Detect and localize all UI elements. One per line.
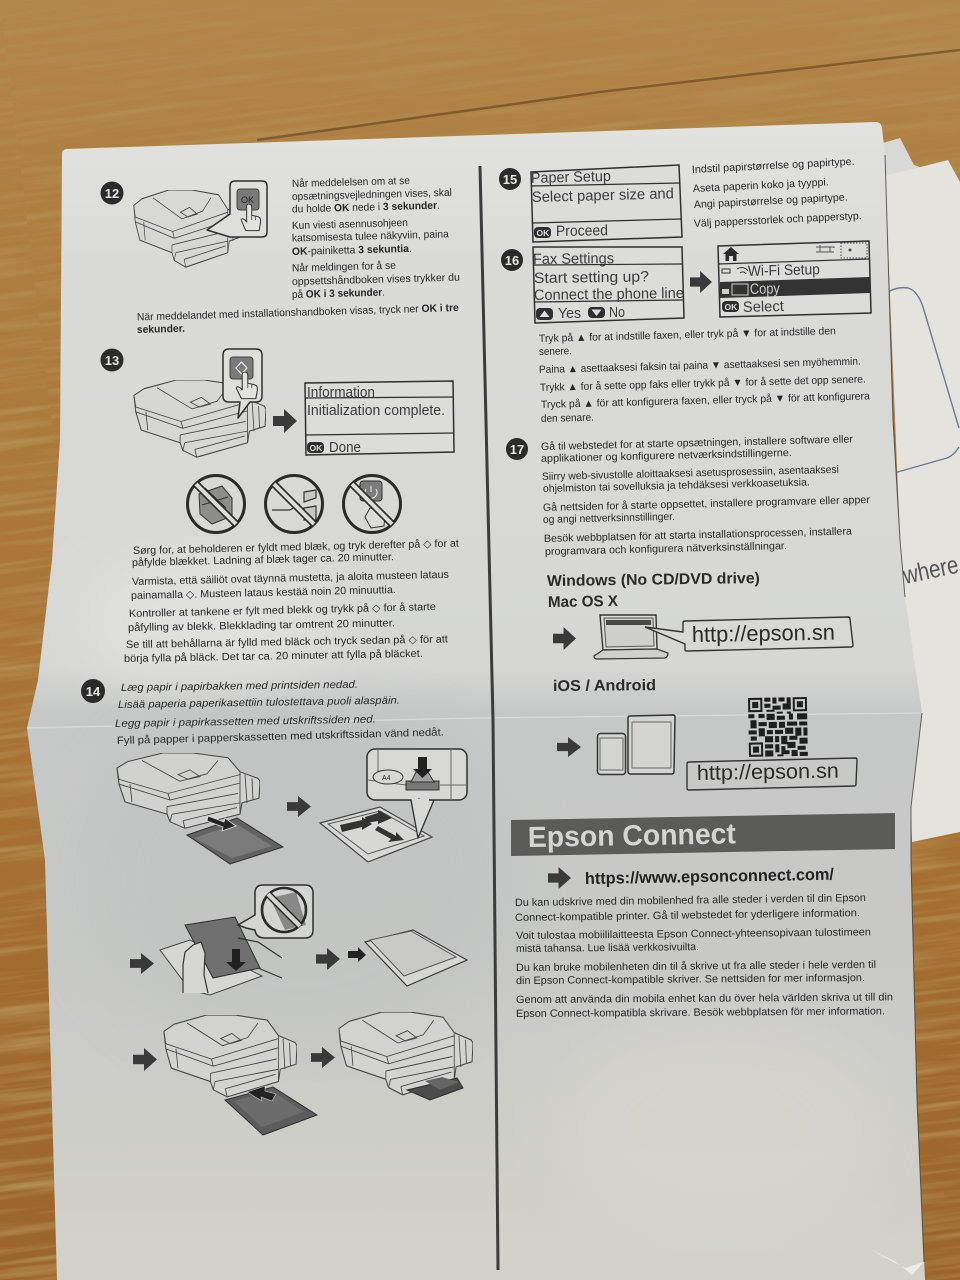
badge 17 (506, 438, 528, 460)
heading: Windows / Mac (547, 570, 760, 611)
icon: laptop (594, 615, 668, 659)
Epson Connect section (511, 813, 895, 1020)
URL: https://www.epsonconnect.com/ (585, 866, 834, 888)
heading: Windows / Mac: Windows (No CD/DVD drive) (547, 570, 760, 590)
step 14 instructions: Fyll på papper i papperskassetten med utskriftssidan vänd nedåt. (117, 726, 444, 747)
step 12 instructions: OK-painiketta 3 sekuntia. (292, 243, 412, 258)
step 15 instructions: Välj pappersstorlek och papperstyp. (694, 210, 862, 230)
arrow: mobile (557, 737, 581, 757)
Epson Connect description (515, 892, 893, 1020)
callout: OK button: OK (241, 195, 254, 205)
QR code (748, 697, 808, 757)
step 16 (501, 241, 871, 425)
step 12 instructions: När meddelandet med installationshandboken visas, tryck ner OK i tre (137, 302, 459, 323)
Epson Connect description: Du kan bruke mobilenheten din til å skrive ut fra alle steder i hele verden til (516, 959, 876, 974)
step 15 instructions: Angi papirstørrelse og papirtype. (694, 191, 848, 211)
printer with output tray extended (339, 1012, 473, 1100)
Epson Connect description: Genom att använda din mobila enhet kan du över hela världen skriva ut till din (516, 991, 893, 1006)
step 12 instructions: på OK i 3 sekunder. (292, 287, 385, 301)
step 17 instructions: Gå til webstedet for at starte opsætningen, installere software eller (541, 433, 853, 453)
step 16 instructions: senere. (539, 345, 572, 358)
LCD screen: paper setup (531, 165, 682, 242)
step 12 (100, 175, 460, 336)
center column divider (480, 166, 498, 1270)
step 14 instructions: Lisää paperia paperikasettiin tulostettava puoli alaspäin. (118, 695, 400, 711)
callout: http://epson.sn (645, 617, 853, 651)
LCD screen: home menu (718, 241, 871, 317)
LCD screen: fax settings: Fax Settings (533, 250, 614, 268)
printer illustration 12 (134, 190, 243, 267)
LCD screen: home menu: Wi-Fi Setup (748, 261, 820, 280)
LCD screen: paper setup: Select paper size and (532, 185, 674, 206)
printer with tray removed (117, 753, 283, 864)
badge 13: 13 (105, 353, 119, 368)
step 15 instructions: Aseta paperin koko ja tyyppi. (693, 176, 829, 195)
step 12 instructions: opsætningsvejledningen vises, skal (292, 187, 452, 203)
LCD screen: paper setup: Paper Setup (531, 168, 611, 187)
step 12 instructions: Kun viesti asennusohjeen (292, 217, 408, 232)
badge 15: 15 (503, 172, 517, 187)
LCD screen: initialization complete: OK (310, 443, 323, 453)
LCD screen: paper setup: OK (536, 228, 550, 238)
LCD screen: initialization complete: Information (307, 384, 375, 401)
LCD screen: initialization complete (305, 381, 454, 456)
step 12 instructions: sekunder. (137, 323, 185, 336)
step 16 instructions: den senare. (541, 412, 594, 425)
step 13 instructions: Kontroller at tankene er fylt med blekk og trykk på ◇ for å starte (129, 601, 436, 620)
step 16 instructions: Trykk ▲ for å sette opp faks eller trykk på ▼ for å sette det opp senere. (540, 373, 866, 394)
LCD screen: home menu: Copy (750, 280, 781, 298)
step 13 instructions: Se till att behållarna är fylld med bläck och tryck sedan på ◇ för att (126, 633, 448, 651)
icon: do not press power (344, 476, 400, 532)
LCD screen: fax settings: Yes (558, 305, 581, 322)
step 12 instructions: katsomisesta tulee näkyviin, paina (292, 228, 449, 244)
arrow 14a (287, 796, 311, 817)
step 13 instructions: painamalla ◇. Musteen lataus kestää noin 20 minuuttia. (131, 584, 396, 602)
arrow 14d (133, 1048, 157, 1071)
step 17 instructions: Gå nettsiden for å starte oppsettet, installere programvare eller apper (543, 494, 870, 514)
heading: Windows / Mac: Mac OS X (548, 593, 619, 611)
step 12 instructions (137, 175, 460, 336)
arrow 16 (690, 271, 712, 293)
banner: Epson Connect (528, 818, 736, 854)
Epson Connect description: mistä tahansa. Lue lisää verkkosivuilta. (516, 941, 699, 955)
icon: do not open printer (188, 476, 244, 532)
back paper sheets: . (892, 427, 895, 439)
step 12 instructions: oppsettshåndboken vises trykker du (292, 272, 460, 288)
badge 15 (499, 168, 521, 190)
icon: phone and tablet (598, 715, 675, 774)
badge 12: 12 (105, 186, 119, 201)
callout: paper orientation warning (238, 885, 313, 938)
Epson Connect description: Connect-kompatible printer. Gå til webstedet for yderligere information. (515, 907, 860, 924)
tray loaded with paper (348, 930, 467, 986)
callout: http://epson.sn: http://epson.sn (692, 620, 835, 647)
step 17 instructions: Besök webbplatsen för att starta installationsprocessen, installera (544, 525, 852, 545)
step 13 instructions: Varmista, että säiliöt ovat täynnä mustetta, ja aloita musteen lataus (132, 569, 449, 588)
Epson Connect description: Voit tulostaa mobiililaitteesta Epson Connect-yhteensopivaan tulostimeen (516, 926, 871, 942)
printer inserting loaded tray (164, 1015, 317, 1135)
step 12 instructions: Når meldingen for å se (292, 260, 396, 274)
LCD screen: paper setup: Proceed (556, 222, 608, 240)
badge 14: 14 (86, 684, 101, 699)
arrow 14b (130, 953, 154, 974)
step 12 instructions: du holde OK nede i 3 sekunder. (292, 200, 440, 215)
step 17 instructions: applikationer og konfigurere netværksindstillingerne. (541, 447, 792, 465)
step 17 instructions: og angi nettverksinnstillinger. (543, 511, 675, 526)
prohibition icons (188, 476, 400, 532)
banner (511, 813, 895, 856)
LCD screen: fax settings: Start setting up? (534, 268, 649, 287)
step 17 instructions: Siirry web-sivustolle aloittaaksesi asetusprosessiin, asentaaksesi (542, 464, 839, 483)
arrow 14e (311, 1047, 335, 1068)
badge 14 (81, 679, 105, 703)
step 13 instructions: påfylling av blekk. Blekklading tar omtrent 20 minutter. (128, 617, 395, 634)
arrow: Epson Connect (548, 867, 571, 889)
step 13 instructions: påfylde blækket. Ladning af blæk tager ca. 20 minutter. (132, 551, 394, 569)
step 13 instructions (124, 538, 459, 665)
icon: do not unplug (266, 476, 322, 532)
printer illustration 13 (134, 380, 266, 457)
loading paper with hands (160, 917, 282, 995)
step 15 (499, 156, 862, 242)
Epson Connect description: Du kan udskrive med din mobilenhed fra alle steder i verden til din Epson (515, 892, 866, 909)
step 17 instructions: ohjelmiston tai sovelluksia ja tehdäksesi verkkoasetuksia. (543, 476, 810, 495)
paper tray with guides and A4 callout (320, 749, 467, 862)
step 17 instructions (541, 433, 870, 558)
LCD screen: initialization complete: Initialization complete. (307, 402, 445, 419)
step 15 instructions (692, 156, 862, 230)
Epson Connect description: Epson Connect-kompatibla skrivare. Besök webbplatsen för mer information. (516, 1005, 885, 1020)
badge 13 (100, 348, 124, 372)
arrow: Windows (553, 627, 576, 650)
box: http://epson.sn: http://epson.sn (697, 760, 839, 785)
badge 16 (501, 249, 523, 271)
step 16 instructions: Tryk på ▲ for at indstille faxen, eller tryk på ▼ for at indstille den (539, 325, 836, 345)
paper tray with guides and A4 callout: A4 (382, 775, 391, 782)
callout: OK button (207, 181, 267, 237)
step 14 instructions: Læg papir i papirbakken med printsiden nedad. (121, 679, 358, 694)
Epson Connect description: din Epson Connect-kompatible skriver. Se nettsiden for mer informasjon. (516, 972, 865, 987)
step 15 instructions: Indstil papirstørrelse og papirtype. (692, 156, 855, 176)
step 17 (506, 433, 870, 790)
torn corner at bottom right (868, 1248, 924, 1275)
step 13 instructions: börja fylla på bläck. Det tar ca. 20 minuter att fylla på bläcket. (124, 648, 423, 665)
LCD screen: home menu: OK (724, 302, 738, 312)
step 16 instructions (539, 325, 870, 425)
step 16 instructions: Tryck på ▲ för att konfigurera faxen, eller tryck på ▼ för att konfigurera (541, 390, 870, 411)
heading: iOS / Android: iOS / Android (553, 677, 656, 695)
step 12 instructions: Når meddelelsen om at se (292, 175, 410, 190)
LCD screen: fax settings (533, 247, 684, 323)
LCD screen: fax settings: Connect the phone line (534, 285, 684, 304)
box: http://epson.sn (687, 758, 857, 790)
step 13 (100, 348, 459, 665)
LCD screen: home menu: Select (743, 298, 785, 316)
arrow 14c (316, 948, 340, 970)
badge 16: 16 (505, 253, 519, 268)
arrow 13 (273, 409, 297, 433)
step 13 instructions: Sørg for, at beholderen er fyldt med blæk, og tryk derefter på ◇ for at (133, 538, 459, 557)
LCD screen: fax settings: No (609, 304, 625, 321)
step 17 instructions: programvara och konfigurera nätverksinställningar. (545, 540, 787, 558)
step 14 (81, 679, 473, 1135)
callout: start button (223, 349, 262, 418)
step 16 instructions: Paina ▲ asettaaksesi faksin tai paina ▼ asettaaksesi sen myöhemmin. (539, 356, 861, 376)
back paper sheets (883, 138, 960, 842)
badge 12 (100, 182, 124, 204)
badge 17: 17 (510, 442, 524, 457)
step 14 instructions (115, 679, 444, 747)
LCD screen: initialization complete: Done (329, 439, 361, 456)
step 14 instructions: Legg papir i papirkassetten med utskriftssiden ned. (115, 713, 376, 730)
